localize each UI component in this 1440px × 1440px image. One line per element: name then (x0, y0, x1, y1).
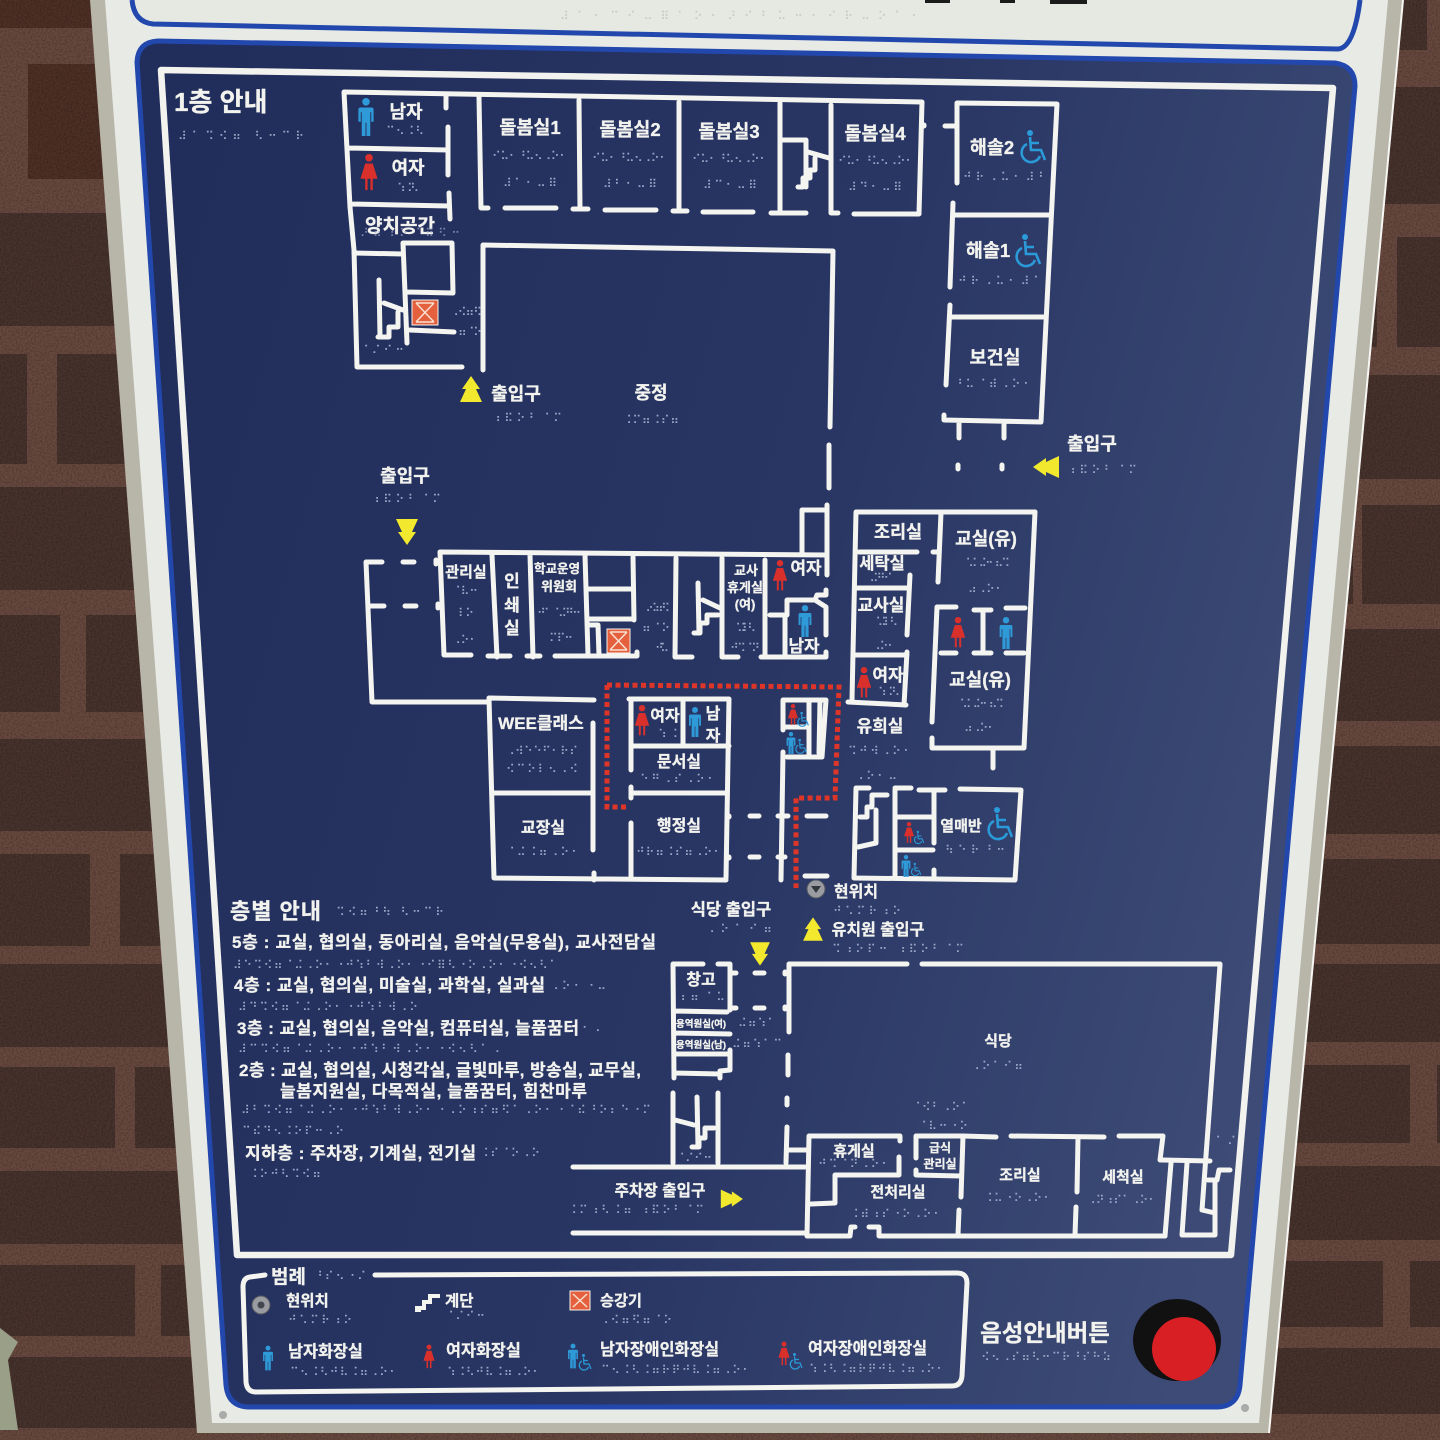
room: 해솔2 (963, 130, 1047, 184)
route: red dotted path (607, 685, 839, 888)
room: 돌봄실2: ⠊⠥⠂⠘⠥⠢⠠⠕⠂ (592, 151, 668, 165)
room: 해솔1: ⠚⠗⠠⠥⠂⠼⠁ (958, 274, 1042, 288)
room: 세탁실: 세탁실 (859, 554, 905, 573)
room: 해솔2: 해솔2 (970, 137, 1014, 158)
room: 관리실: ⠇⠕ (458, 606, 474, 620)
room: 행정실 (636, 816, 722, 859)
braille: elevator north-west: ⠠⠪⠶⠫ (450, 305, 482, 319)
room: 용역원실(여) (676, 1016, 776, 1030)
room: 교사실: ⠈⠬⠇⠣ (872, 615, 898, 629)
room: 남자 toilet: 남자 (389, 102, 423, 122)
room: 행정실: 행정실 (657, 816, 701, 835)
room: 창고: 창고 (686, 971, 716, 989)
voice guide label: ⠪⠢⠠⠎⠶⠣⠒⠉⠗⠘⠎⠓⠵ (981, 1350, 1111, 1364)
room: 식당: 식당 (984, 1033, 1012, 1050)
room: 조리실 south: ⠨⠥⠐⠕⠠⠕⠂ (984, 1191, 1052, 1205)
room: 돌봄실4: 돌봄실4 (844, 123, 906, 144)
room: 문서실: ⠑⠛⠠⠎⠠⠕⠂ (640, 772, 716, 786)
room: 여자 toilet: ⠱⠨⠣ (397, 181, 419, 195)
room: WEE클래스: ⠪⠉⠕⠇⠢⠠⠪ (506, 762, 578, 776)
room: 교실(유) upper: 교실(유) (955, 529, 1017, 549)
shaft braille: ⠚⠥ (655, 641, 669, 655)
room: 식당: ⠠⠕⠁⠊⠶ (971, 1059, 1023, 1073)
legend: 승강기: ⠠⠪⠶⠫⠶⠈⠕ (600, 1313, 672, 1327)
entrance: north: ⠰⠯⠕⠃⠈⠍ (492, 411, 562, 425)
room: 돌봄실1: ⠊⠥⠂⠘⠥⠢⠠⠕⠂ (492, 149, 568, 163)
room: 교사 휴게실(여): ⠈⠬⠇⠣ (732, 621, 756, 635)
room: 돌봄실3: 돌봄실3 (698, 121, 760, 142)
room: 교실(유) lower: ⠈⠬⠠⠕⠂⠦⠩ (956, 697, 1004, 711)
shaft braille: ⠶⠈⠕ (642, 621, 670, 635)
room: 용역원실(남) (676, 1037, 782, 1051)
legend: 남자화장실: ⠉⠢⠨⠣⠚⠧⠨⠶⠠⠕⠂ (290, 1365, 398, 1379)
room: 조리실 south (984, 1167, 1052, 1205)
legend heading: 범례 (271, 1266, 306, 1288)
braille: elevator north-west: ⠈⠌⠊⠒ (360, 343, 404, 357)
room: 용역원실(남): ⠬⠶⠱⠁⠉ (732, 1037, 782, 1051)
room: 남자 central east (788, 605, 820, 656)
room: 관리실: 관리실 (445, 564, 487, 581)
room: 돌봄실3 (692, 121, 768, 192)
text block: floor directory: ⠼⠉⠩⠪⠶⠈⠬⠠⠕⠂⠐⠚⠱⠃⠺⠠⠕⠂⠐⠪⠢⠣⠁⠠ (238, 1042, 500, 1056)
room: 전처리실 (850, 1184, 942, 1221)
room: 교사 휴게실(여): 휴게실 (727, 580, 763, 595)
text block: floor directory: ⠉⠮⠙⠢⠨⠕⠏⠒⠠⠕ (242, 1124, 344, 1138)
entrance: east: ⠰⠯⠕⠃⠈⠍ (1067, 463, 1137, 477)
legend: 여자화장실: ⠱⠨⠣⠚⠧⠨⠶⠠⠕⠂ (447, 1365, 541, 1379)
room: 돌봄실2: 돌봄실2 (599, 119, 661, 140)
room: 해솔2: ⠚⠗⠠⠥⠂⠼⠃ (963, 170, 1047, 184)
top title box (132, 0, 1360, 49)
stair braille: ⠈⠌⠊⠒ (676, 1151, 712, 1165)
room: 돌봄실4: ⠼⠙⠂⠤⠿ (848, 180, 902, 194)
legend: 여자화장실: 여자화장실 (446, 1342, 521, 1360)
room: 급식 관리실 (923, 1141, 957, 1171)
entrance: 주차장 출입구: 주차장 출입구 (615, 1182, 705, 1200)
room: 조리실: 조리실 (874, 522, 922, 542)
legend box (243, 1266, 967, 1392)
room: 교실(유) upper (955, 529, 1017, 596)
entrance: 유치원 출입구: ⠩⠰⠕⠏⠒ ⠰⠯⠕⠃⠈⠍ (832, 942, 964, 956)
room: WEE클래스 (498, 714, 584, 776)
room: 용역원실(여): 용역원실(여) (676, 1018, 726, 1030)
room: 인쇄실: 쇄 (504, 596, 520, 615)
room: 관리실: ⠠⠕⠂ (452, 633, 478, 647)
marker: 현위치 (807, 880, 901, 918)
braille: 급식 관리실 above: ⠈⠪⠃⠠⠕⠁ (912, 1100, 970, 1114)
room: 인쇄실 (504, 572, 520, 638)
heading: 층별 안내 (230, 899, 444, 924)
room: 교사실: ⠠⠕⠂ (872, 639, 896, 653)
voice guide label: 음성안내버튼 (980, 1320, 1110, 1346)
room: 문서실: 문서실 (657, 753, 701, 771)
room: 여자 남자 south: ⠱⠨ (658, 727, 678, 741)
voice guide red button (1133, 1299, 1221, 1381)
text block: floor directory: 지하층 : 주차장, 기계실, 전기실 (245, 1144, 476, 1163)
braille: 급식 관리실 above (912, 1100, 970, 1133)
entrance: west (371, 466, 441, 545)
room: 여자 kindergarten: ⠱⠨⠣ (878, 685, 900, 699)
room: 관리실 (445, 564, 487, 647)
room: 해솔1 (958, 234, 1042, 288)
room: 인쇄실: 실 (504, 619, 520, 638)
room: 유희실: 유희실 (857, 717, 903, 736)
room: 용역원실(여): ⠬⠶⠱⠁ (738, 1016, 776, 1030)
room: 남자 central east: 남자 (788, 637, 820, 656)
legend heading (271, 1266, 366, 1288)
label: 중정 courtyard: ⠨⠍⠶⠨⠎⠶ (623, 413, 679, 427)
room: 급식 관리실: 급식 (929, 1141, 951, 1155)
room: 교장실: 교장실 (521, 819, 565, 837)
text block: floor directory: 5층 : 교실, 협의실, 동아리실, 음악실(무용실), 교사전담실 (232, 933, 656, 952)
entrance: east (1033, 434, 1137, 478)
label: 중정 courtyard: 중정 (634, 383, 668, 403)
toilets: accessible south-centre (787, 704, 808, 754)
heading: 1층 안내 (174, 87, 304, 143)
room: 학교운영위원회: 위원회 (541, 579, 577, 594)
legend: 남자장애인화장실: ⠉⠢⠨⠣⠨⠶⠗⠟⠚⠧⠨⠶⠠⠕⠂ (601, 1363, 751, 1377)
room: 교실(유) lower: 교실(유) (949, 670, 1011, 690)
legend: 계단: 계단 (445, 1292, 474, 1310)
legend: 여자장애인화장실: ⠱⠨⠣⠨⠶⠗⠟⠚⠧⠨⠶⠠⠕⠂ (809, 1362, 945, 1376)
room: 여자 central east (773, 559, 822, 590)
text block: floor directory: ⠨⠎⠈⠕⠠⠕ (480, 1146, 540, 1160)
heading: 1층 안내: 1층 안내 (174, 87, 267, 117)
room: 교실(유) upper: ⠈⠬⠠⠕⠂⠦⠩ (962, 556, 1010, 570)
toilets: accessible 열매반 (902, 822, 924, 877)
room: WEE클래스: ⠠⠺⠑⠑⠋⠂⠗⠎ (506, 744, 578, 758)
entrance: west: 출입구 (380, 466, 430, 486)
room: 열매반 (940, 807, 1012, 857)
room: 휴게실 (818, 1143, 890, 1171)
room: 창고 (677, 971, 725, 1004)
entrance: west: ⠰⠯⠕⠃⠈⠍ (371, 492, 441, 506)
legend: 남자장애인화장실: 남자장애인화장실 (600, 1341, 719, 1359)
room: 용역원실(남): 용역원실(남) (676, 1039, 726, 1051)
label: 중정 courtyard (623, 383, 679, 427)
room: 양치공간 (360, 215, 460, 240)
icon: elevator central (607, 629, 630, 653)
room: 세척실 (1087, 1169, 1157, 1207)
room: 여자 central east: 여자 (790, 559, 822, 578)
room: 여자 kindergarten (857, 666, 904, 699)
entrance: 유치원 출입구 (803, 917, 964, 956)
entrance: north: 출입구 (491, 384, 541, 404)
top title box: ⠼⠁⠂⠉⠊⠤⠿⠁⠕⠂⠜⠊⠃⠥⠒⠂⠊⠗⠤⠕⠁⠂ (560, 9, 920, 23)
text block: floor directory: 늘봄지원실, 다목적실, 늘품꿈터, 힘찬마루 (280, 1082, 587, 1101)
entrance: 주차장 출입구: ⠨⠍⠰⠣⠨⠶ ⠰⠯⠕⠃⠈⠍ (568, 1203, 704, 1217)
room: 학교운영위원회: 학교운영 (534, 561, 580, 576)
voice guide label (980, 1320, 1111, 1364)
room: 돌봄실4: ⠊⠥⠂⠘⠥⠢⠠⠕⠂ (838, 154, 914, 168)
entrance: 주차장 출입구 (568, 1182, 743, 1217)
room: 여자 kindergarten: 여자 (872, 666, 904, 685)
room: 돌봄실1: 돌봄실1 (499, 117, 561, 138)
room: 교실(유) lower (949, 670, 1011, 735)
legend: 현위치: ⠚⠡⠍⠗⠰⠕ (288, 1313, 352, 1327)
shaft braille: ⠠⠪⠶⠫ (642, 601, 670, 615)
entrance: 식당 출입구 (691, 900, 772, 966)
text block: floor directory: ⠼⠑⠩⠪⠶⠈⠬⠠⠕⠂⠐⠚⠱⠃⠺⠠⠕⠂⠐⠊⠿⠣⠐⠕⠠⠕⠂⠐⠪⠢⠣⠁ (233, 958, 558, 972)
toilets: pair between classrooms (951, 617, 1012, 649)
room: 교장실 (506, 819, 580, 859)
room: 인쇄실: 인 (504, 572, 520, 591)
text block: floor directory: 3층 : 교실, 협의실, 음악실, 컴퓨터실, 늘품꿈터 (237, 1019, 579, 1038)
room: 여자 toilet: 여자 (391, 158, 425, 178)
text block: floor directory: ⠂⠄ (582, 1021, 604, 1035)
entrance: 식당 출입구: ⠠⠕⠁⠊⠶ (706, 922, 772, 936)
room: 여자 남자 south (635, 705, 721, 745)
text block: floor directory: 2층 : 교실, 협의실, 시청각실, 글빛마루, 방송실, 교무실, (239, 1061, 641, 1080)
room: 학교운영위원회: ⠍⠏⠒ (549, 631, 573, 645)
room: 휴게실: 휴게실 (833, 1143, 875, 1160)
room: 돌봄실3: ⠊⠥⠂⠘⠥⠢⠠⠕⠂ (692, 152, 768, 166)
room: 세척실: ⠠⠝⠰⠎⠁⠠⠕⠂ (1087, 1193, 1157, 1207)
heading: 층별 안내: 층별 안내 (230, 899, 321, 924)
room: 세척실: 세척실 (1102, 1169, 1144, 1186)
room: 창고: ⠰⠶⠈⠥ (677, 990, 725, 1004)
legend heading: ⠘⠎⠢⠐⠌ (314, 1269, 366, 1283)
room: 보건실: ⠘⠥⠈⠾⠠⠕⠂ (954, 377, 1032, 391)
room: 식당 (971, 1033, 1023, 1073)
room: 유희실: ⠠⠕⠂⠤ (855, 769, 897, 783)
icon: elevator north-west (412, 300, 438, 325)
room: 교사 휴게실(여): ⠚⠩⠈⠝ (730, 641, 760, 655)
room: 여자 남자 south: 자 (706, 727, 721, 745)
room: 유희실 (848, 717, 912, 783)
room: 양치공간: ⠜⠶⠰⠕⠈⠿⠫⠒ (360, 226, 460, 240)
legend: 현위치 (252, 1292, 352, 1327)
room: 교사 휴게실(여): 교사 (734, 563, 758, 578)
text block: floor directory: ⠨⠕⠚⠣⠩⠪⠶ (249, 1167, 321, 1181)
room: 세탁실 (859, 554, 905, 585)
braille: elevator north-west: ⠶⠈⠕ (458, 325, 482, 339)
room: 학교운영위원회 (534, 561, 581, 645)
room: 돌봄실1 (492, 117, 568, 190)
legend: 계단: ⠈⠌⠊⠒ (445, 1309, 485, 1323)
room: 보건실: 보건실 (969, 347, 1021, 368)
heading: 1층 안내: ⠼⠁⠩⠪⠶ ⠣⠒⠉⠗ (178, 129, 304, 143)
room: 열매반: ⠳⠑⠗⠘⠒ (945, 843, 1005, 857)
room: 급식 관리실: 관리실 (923, 1157, 957, 1171)
room: 행정실: ⠚⠗⠶⠨⠎⠶⠠⠕⠂ (636, 845, 722, 859)
room: 교사 휴게실(여): (여) (735, 597, 755, 612)
room: 돌봄실2: ⠼⠃⠂⠤⠿ (603, 177, 657, 191)
legend: 계단 (415, 1292, 485, 1323)
marker: 현위치: 현위치 (834, 883, 878, 901)
braille: 급식 관리실 above: ⠈⠧⠒⠐⠕ (918, 1119, 968, 1133)
room: 교사실 (858, 596, 904, 653)
legend: 현위치: 현위치 (286, 1292, 329, 1310)
room: 여자 toilet (360, 154, 425, 195)
text block: floor directory: ⠼⠃⠩⠪⠶⠈⠬⠠⠕⠂⠐⠚⠱⠃⠺⠠⠕⠂⠐⠠⠕⠰⠎⠶⠫⠁⠠⠕⠂⠐⠈⠮⠘⠕⠆⠑⠐⠍ (241, 1103, 651, 1117)
text block: floor directory: ⠠⠕⠂⠐⠤ (550, 979, 606, 993)
text block: floor directory: 4층 : 교실, 협의실, 미술실, 과학실, 실과실 (234, 976, 545, 995)
room: 돌봄실4 (838, 123, 914, 194)
entrance: east: 출입구 (1067, 434, 1117, 454)
room: 교사실: 교사실 (858, 596, 904, 615)
room: 교장실: ⠈⠬⠨⠶⠠⠕⠂ (506, 845, 580, 859)
legend: 여자장애인화장실 (778, 1340, 945, 1376)
room: 교사 휴게실(여) (727, 563, 763, 655)
room: 여자 남자 south: 여자 (650, 707, 680, 725)
text block: floor directory: ⠼⠙⠩⠪⠶⠈⠬⠠⠕⠂⠐⠚⠱⠃⠺⠠⠕ (238, 1000, 418, 1014)
room: 보건실 (954, 347, 1032, 391)
room: 해솔1: 해솔1 (966, 240, 1010, 261)
room: 관리실: ⠈⠧⠒ (452, 584, 478, 598)
legend: 승강기 (570, 1291, 672, 1327)
room: 전처리실: ⠨⠾⠰⠎⠐⠕⠠⠕⠂ (850, 1207, 942, 1221)
room: 휴게실: ⠚⠩⠈⠝⠠⠕⠂ (818, 1157, 890, 1171)
legend: 남자화장실: 남자화장실 (288, 1343, 363, 1361)
shaft braille (642, 601, 670, 655)
room: 남자 toilet: ⠉⠢⠨⠣ (386, 124, 424, 138)
room: 유희실: ⠩⠚⠺⠠⠕⠂ (848, 744, 912, 758)
room: 돌봄실3: ⠼⠉⠂⠤⠿ (703, 178, 757, 192)
room: 여자 남자 south: 남 (706, 705, 721, 723)
stair braille (676, 1134, 1236, 1165)
legend: 여자화장실 (423, 1342, 541, 1379)
text block: floor directory (232, 933, 656, 1181)
room: 세탁실: ⠠⠝⠓⠁ (866, 571, 896, 585)
room: 조리실 south: 조리실 (999, 1167, 1041, 1184)
legend: 남자장애인화장실 (568, 1341, 751, 1377)
room: 돌봄실1: ⠼⠁⠂⠤⠿ (503, 176, 557, 190)
legend: 남자화장실 (263, 1343, 398, 1379)
room: 돌봄실2 (592, 119, 668, 191)
braille: elevator north-west (360, 305, 482, 357)
floor plan: central wing walls (366, 505, 1035, 880)
room: 문서실 (640, 753, 716, 786)
marker: 현위치: ⠚⠡⠍⠗⠰⠕ (833, 904, 901, 918)
room: 전처리실: 전처리실 (870, 1184, 926, 1201)
entrance: north (460, 376, 562, 425)
room: 교실(유) lower: ⠴⠠⠕⠂ (964, 721, 996, 735)
room: 열매반: 열매반 (940, 818, 982, 835)
floor plan: south wing walls (573, 964, 1230, 1236)
room: 학교운영위원회: ⠚⠁⠈⠬⠛⠒ (537, 606, 581, 620)
legend: 승강기: 승강기 (600, 1293, 642, 1310)
room: 양치공간: 양치공간 (365, 215, 435, 237)
room: 남자 toilet (358, 98, 424, 138)
entrance: 식당 출입구: 식당 출입구 (691, 900, 771, 919)
entrance: 유치원 출입구: 유치원 출입구 (832, 921, 925, 939)
room: WEE클래스: WEE클래스 (498, 714, 584, 733)
room: 교실(유) upper: ⠴⠠⠕⠂ (968, 582, 1004, 596)
legend: 여자장애인화장실: 여자장애인화장실 (808, 1340, 927, 1358)
stair braille: ⠈⠌ (1212, 1134, 1236, 1148)
floor plan: north wing walls (344, 92, 1057, 488)
heading: 층별 안내: ⠩⠪⠶⠘⠳ ⠣⠒⠉⠗ (336, 905, 444, 919)
